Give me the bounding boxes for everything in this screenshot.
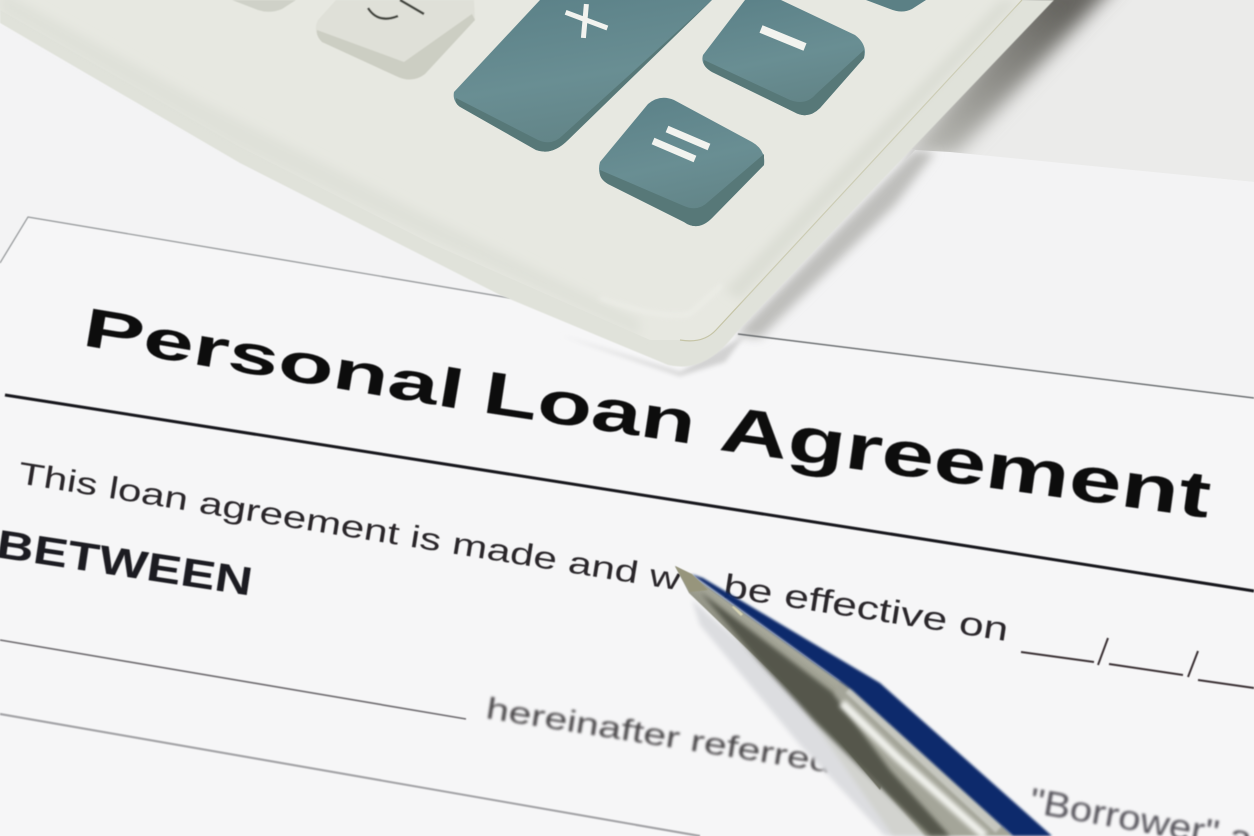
pen tip bbox=[675, 566, 708, 592]
plus symbol bbox=[564, 2, 609, 40]
calculator bbox=[0, 0, 1054, 367]
form lines bbox=[0, 640, 700, 836]
grey key with symbol bbox=[316, 0, 475, 80]
agreement sentence: This loan agreement is made and w bbox=[16, 455, 684, 597]
pen highlight bbox=[842, 703, 985, 836]
calculator shadow on paper bbox=[735, 150, 935, 338]
calculator top face bbox=[0, 0, 1022, 341]
pen shadow bbox=[692, 600, 960, 836]
pen bbox=[675, 566, 1052, 836]
pen small glint bbox=[733, 606, 742, 615]
title: Personal Loan Agreement: Loan bbox=[479, 359, 701, 457]
calculator side band bbox=[0, 0, 1054, 367]
soft contact shadow under calculator bbox=[560, 335, 745, 376]
backdrop sheet top right bbox=[900, 0, 1254, 182]
minus key bbox=[702, 0, 865, 115]
grey key left bbox=[232, 0, 296, 12]
title: Personal Loan Agreement: Personal bbox=[79, 296, 469, 421]
lower edge shading bbox=[0, 0, 640, 336]
agreement sentence: be effective on bbox=[721, 567, 1011, 648]
face corner highlight bbox=[600, 285, 722, 315]
upper paper sheet bbox=[0, 24, 1254, 398]
title: Personal Loan Agreement: Agreement bbox=[716, 393, 1215, 532]
pen olive lower body bbox=[823, 680, 1013, 836]
equals key bbox=[599, 98, 764, 226]
date blanks bbox=[1021, 638, 1254, 688]
pen light strip bbox=[850, 688, 1000, 828]
pen dark band bbox=[700, 592, 950, 836]
right face shading bbox=[725, 0, 1020, 300]
agreement sentence bbox=[16, 455, 1011, 648]
pen pale lower strip bbox=[800, 703, 945, 836]
form border lines bbox=[0, 217, 1254, 398]
calculator shadow on backdrop bbox=[905, 0, 1120, 155]
plus key bbox=[454, 0, 712, 152]
hereinafter text: hereinafter referred bbox=[484, 690, 835, 780]
seam bbox=[680, 0, 1022, 341]
equals symbol bbox=[653, 129, 709, 159]
title: Personal Loan Agreement bbox=[79, 296, 1215, 532]
heading rule bbox=[5, 395, 1254, 591]
minus symbol bbox=[761, 29, 805, 47]
top right key fragment bbox=[866, 0, 926, 12]
pen blue band bbox=[691, 574, 1052, 836]
pen silver upper body bbox=[675, 566, 900, 790]
